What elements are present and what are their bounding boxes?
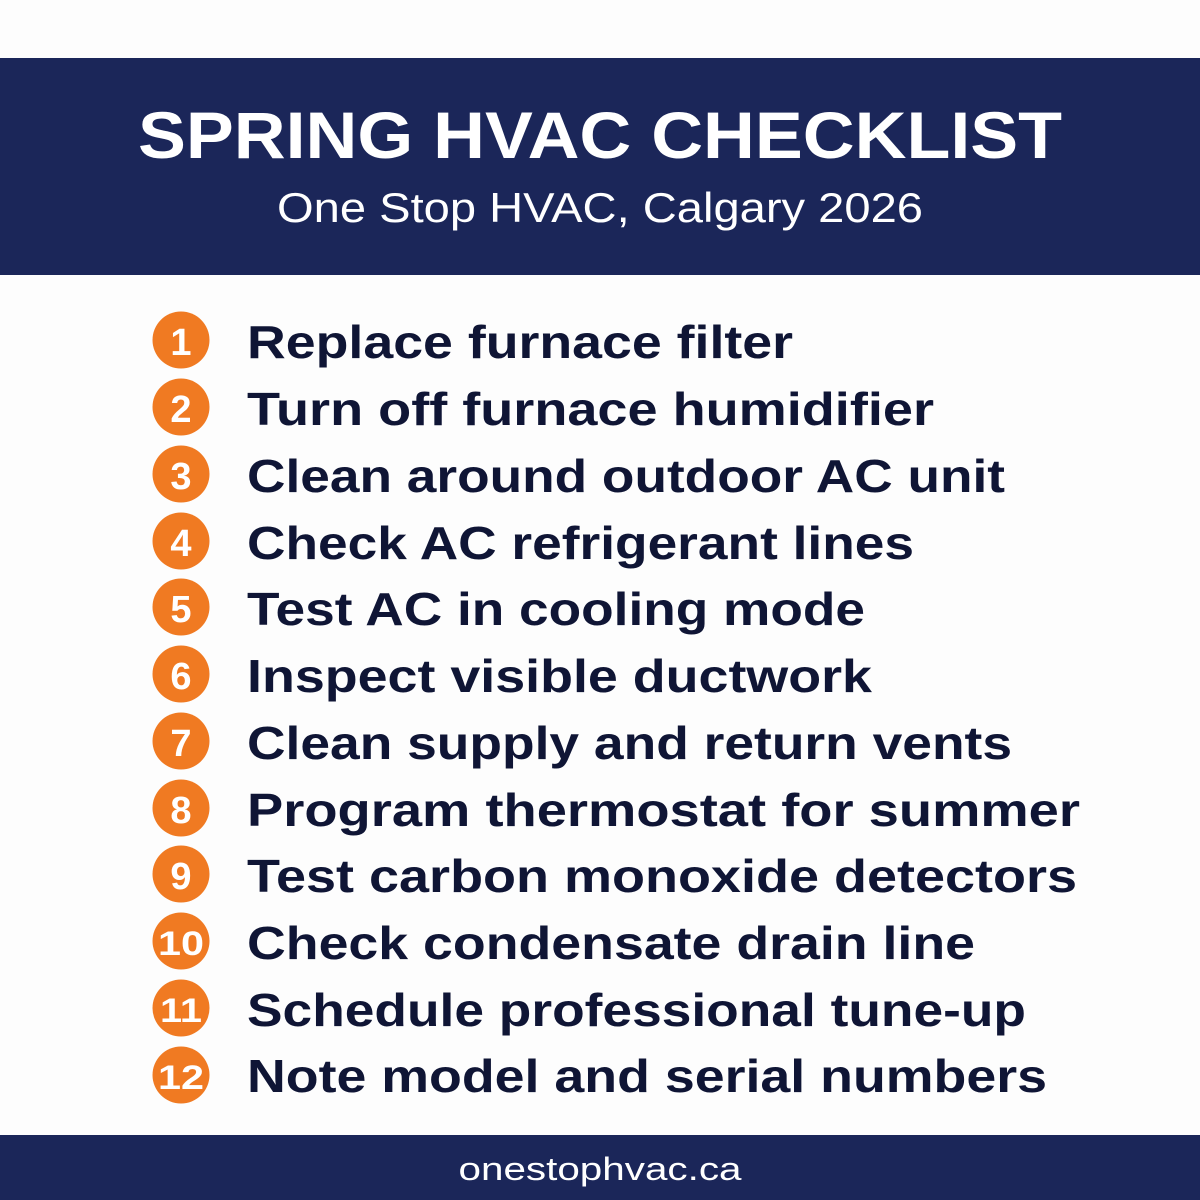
item 1: 1 [170, 322, 192, 364]
footer bar [0, 1135, 1200, 1200]
title: SPRING HVAC CHECKLIST [138, 98, 1062, 172]
item 3: Clean around outdoor AC unit [247, 450, 1005, 502]
item 12 [152, 1046, 1047, 1104]
item 12: Note model and serial numbers [247, 1050, 1047, 1102]
item 10: Check condensate drain line [247, 917, 975, 969]
item 6: 6 [170, 656, 192, 698]
item 10 [152, 912, 975, 970]
item 4: 4 [170, 523, 192, 565]
item 11: Schedule professional tune-up [247, 984, 1026, 1036]
item 4 [152, 512, 914, 570]
item 12: 12 [158, 1059, 204, 1097]
item 9: Test carbon monoxide detectors [247, 850, 1077, 902]
item 4: Check AC refrigerant lines [247, 517, 914, 569]
item 9: 9 [170, 856, 192, 898]
item 2: 2 [170, 389, 192, 431]
website: onestophvac.ca [458, 1151, 742, 1187]
item 7 [152, 712, 1012, 770]
item 5: Test AC in cooling mode [247, 583, 865, 635]
item 2: Turn off furnace humidifier [247, 383, 934, 435]
item 3: 3 [170, 456, 192, 498]
item 8: 8 [170, 790, 192, 832]
subtitle: One Stop HVAC, Calgary 2026 [277, 184, 923, 231]
item 5: 5 [170, 589, 192, 631]
header banner [0, 58, 1200, 275]
checklist [152, 312, 1080, 1104]
item 7: 7 [170, 723, 192, 765]
item 8 [152, 780, 1080, 836]
item 1: Replace furnace filter [247, 316, 793, 368]
item 1 [152, 312, 793, 368]
item 2 [152, 378, 934, 436]
item 9 [152, 846, 1077, 902]
item 8: Program thermostat for summer [247, 784, 1080, 836]
item 10: 10 [158, 925, 204, 963]
item 7: Clean supply and return vents [247, 717, 1012, 769]
item 6 [152, 646, 872, 702]
item 5 [152, 578, 865, 636]
item 6: Inspect visible ductwork [247, 650, 872, 702]
item 11: 11 [160, 992, 202, 1030]
